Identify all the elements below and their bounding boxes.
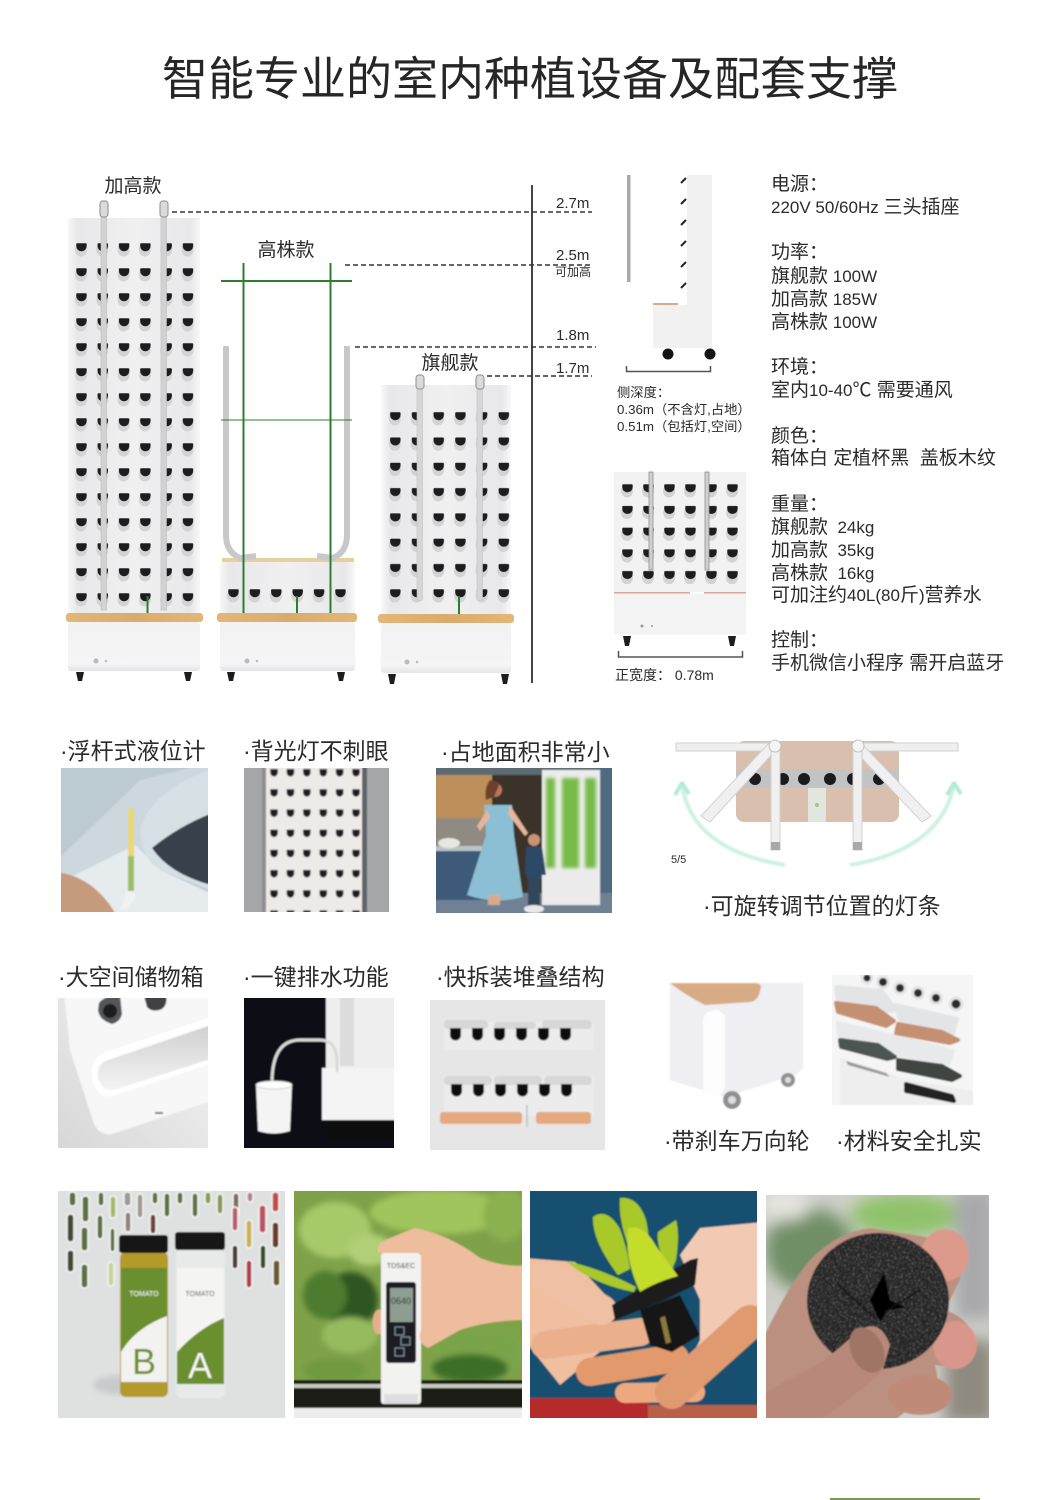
photo: TDS meter and lettuce: TDS&EC bbox=[387, 1263, 415, 1270]
spec text block: 旗舰款 24kg bbox=[771, 516, 874, 538]
caption: caster wheels: ·带刹车万向轮 bbox=[664, 1128, 810, 1154]
tower: 加高款 bbox=[66, 175, 203, 681]
caption: small footprint: ·占地面积非常小 bbox=[441, 739, 610, 765]
photo: TDS meter and lettuce: 0640 bbox=[391, 1296, 411, 1306]
caption: rotating light bars: ·可旋转调节位置的灯条 bbox=[703, 893, 941, 919]
photo: stacked modules bbox=[430, 1000, 605, 1150]
photo: TDS meter and lettuce bbox=[294, 1191, 522, 1418]
photo: nutrient bottles A and B: A bbox=[188, 1345, 212, 1386]
tower: 高株款 bbox=[217, 239, 357, 681]
caption: storage box: ·大空间储物箱 bbox=[58, 964, 204, 990]
height labels bbox=[555, 195, 591, 377]
photo: family and tower bbox=[436, 768, 612, 913]
tower: 旗舰款: 旗舰款 bbox=[421, 352, 479, 374]
side view diagram: 0.51m（包括灯,空间） bbox=[617, 419, 751, 434]
spec text block: 高株款 100W bbox=[771, 311, 877, 333]
side view diagram bbox=[617, 175, 751, 434]
height labels: 2.5m bbox=[556, 247, 589, 264]
title: 智能专业的室内种植设备及配套支撑 bbox=[162, 53, 898, 105]
spec text block: 加高款 185W bbox=[771, 288, 877, 310]
photo: nutrient bottles A and B: TOMATO bbox=[129, 1291, 159, 1298]
spec text block: 控制： bbox=[771, 629, 828, 651]
spec text block: 电源： bbox=[771, 173, 828, 195]
illustration: rotating light bars: 5/5 bbox=[671, 854, 686, 866]
height labels: 可加高 bbox=[555, 264, 591, 279]
side view diagram: 侧深度： bbox=[617, 385, 670, 400]
spec text block: 颜色： bbox=[771, 425, 828, 447]
spec text block: 室内10-40℃ 需要通风 bbox=[771, 379, 953, 401]
tower: 加高款: 加高款 bbox=[104, 175, 162, 197]
dashed height markers bbox=[172, 212, 596, 376]
height labels: 2.7m bbox=[556, 195, 589, 212]
caption: float gauge: ·浮杆式液位计 bbox=[60, 738, 206, 764]
spec text block bbox=[771, 173, 1004, 674]
spec text block: 可加注约40L(80斤)营养水 bbox=[771, 584, 982, 606]
caption: stackable structure: ·快拆装堆叠结构 bbox=[436, 964, 605, 990]
front view diagram: 正宽度： 0.78m bbox=[615, 667, 714, 683]
height labels: 1.8m bbox=[556, 327, 589, 344]
photo: sponge in fingers bbox=[766, 1195, 989, 1418]
bottom green strip bbox=[830, 1498, 980, 1500]
spec text block: 重量： bbox=[771, 493, 828, 515]
photo: drain hose and bucket bbox=[244, 998, 394, 1148]
spec text block: 220V 50/60Hz 三头插座 bbox=[771, 196, 959, 218]
spec text block: 加高款 35kg bbox=[771, 539, 874, 561]
spec text block: 功率： bbox=[771, 241, 828, 263]
photo: nutrient bottles A and B: TOMATO bbox=[185, 1291, 215, 1298]
photo: nutrient bottles A and B bbox=[58, 1191, 285, 1418]
caption: safe material: ·材料安全扎实 bbox=[836, 1128, 982, 1154]
spec text block: 旗舰款 100W bbox=[771, 265, 877, 287]
height labels: 1.7m bbox=[556, 360, 589, 377]
photo: float gauge bbox=[61, 768, 208, 912]
tower: 旗舰款 bbox=[378, 352, 514, 684]
photo: seedling in hands bbox=[530, 1191, 757, 1418]
illustration: rotating light bars bbox=[671, 740, 961, 866]
photo: caster wheel unit bbox=[670, 982, 803, 1110]
side view diagram: 0.36m（不含灯,占地） bbox=[617, 402, 751, 417]
photo: storage box bbox=[58, 998, 208, 1148]
photo: backlight bbox=[244, 768, 389, 912]
photo: exploded layers bbox=[832, 975, 973, 1105]
caption: drain: ·一键排水功能 bbox=[243, 964, 389, 990]
spec text block: 环境： bbox=[771, 356, 828, 378]
front view diagram bbox=[614, 472, 746, 683]
spec text block: 箱体白 定植杯黑 盖板木纹 bbox=[771, 447, 996, 469]
spec text block: 高株款 16kg bbox=[771, 562, 874, 584]
tower: 高株款: 高株款 bbox=[257, 239, 315, 261]
spec text block: 手机微信小程序 需开启蓝牙 bbox=[771, 652, 1004, 674]
height comparison chart bbox=[66, 175, 596, 684]
height axis line bbox=[531, 185, 533, 683]
photo: nutrient bottles A and B: B bbox=[132, 1341, 156, 1382]
caption: backlight: ·背光灯不刺眼 bbox=[243, 738, 389, 764]
